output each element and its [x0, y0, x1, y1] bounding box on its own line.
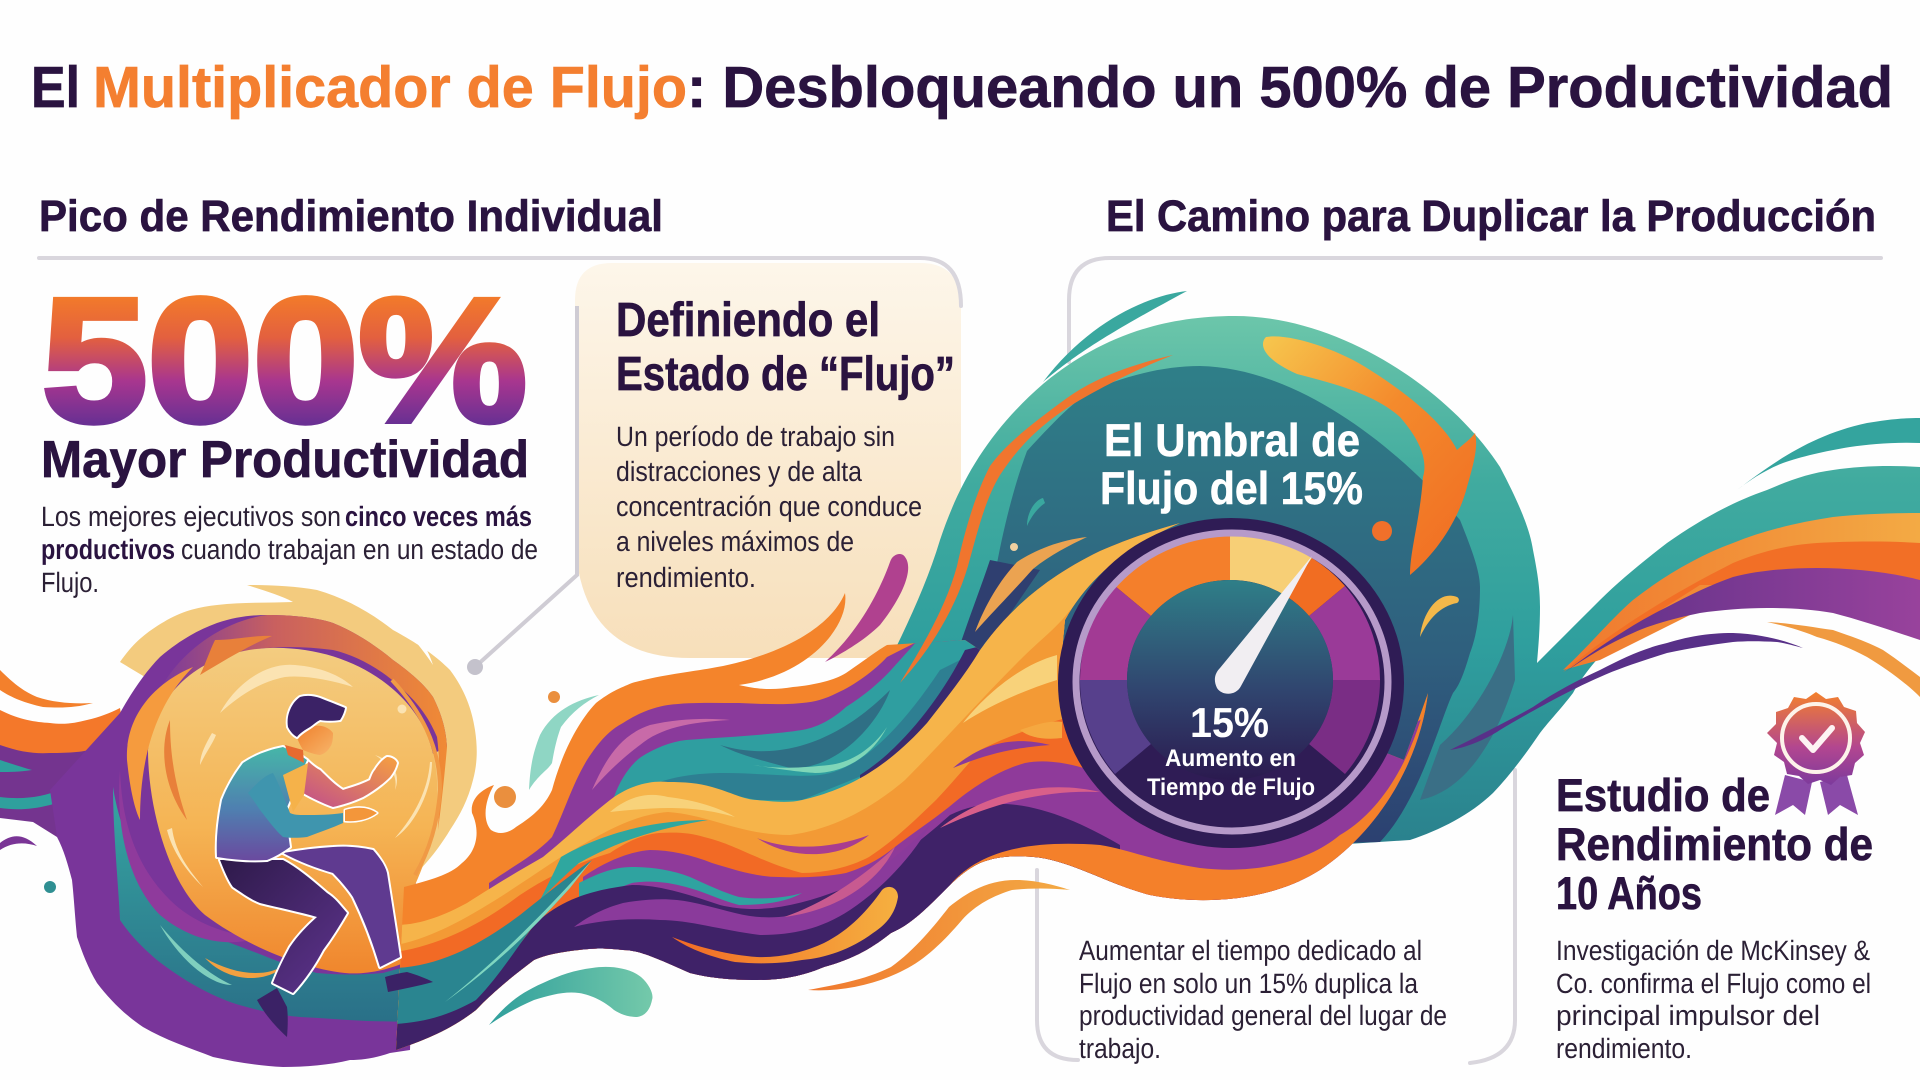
callout body: a niveles máximos de: [616, 526, 854, 557]
far leg: [283, 847, 400, 967]
stat description: cuando trabajan en un estado de: [181, 534, 538, 565]
gauge outer disc: [1058, 518, 1404, 848]
title: El: [31, 55, 80, 120]
stat description: productivos: [41, 534, 175, 565]
orange dots: [494, 691, 560, 808]
mint wisp: [529, 695, 599, 790]
callout body: distracciones y de alta: [616, 456, 862, 487]
callout body: concentración que conduce: [616, 491, 922, 522]
threshold heading: El Umbral de: [1104, 414, 1360, 466]
title: : Desbloqueando un 500% de Productividad: [687, 55, 1893, 120]
orange streak: [808, 880, 1070, 990]
frame lines: [39, 258, 1881, 1063]
purple tail: [1450, 633, 1803, 750]
swirl orange strokes: [127, 636, 440, 875]
stat description: Los mejores ejecutivos son: [41, 501, 341, 532]
gauge caption: Aumento en: [1165, 745, 1296, 772]
chest highlight: [283, 763, 308, 812]
threshold body text: productividad general del lugar de: [1079, 1000, 1447, 1031]
threshold body text: Aumentar el tiempo dedicado al: [1079, 935, 1422, 966]
study heading: Rendimiento de: [1556, 818, 1873, 870]
study body text: Co. confirma el Flujo como el: [1556, 968, 1871, 999]
stat description: cinco veces más: [345, 501, 532, 532]
figure in flow: [217, 696, 433, 1037]
callout body: Un período de trabajo sin: [616, 421, 895, 452]
teal dot: [44, 881, 56, 893]
swirl teal crescent: [113, 787, 412, 1022]
hand: [345, 808, 377, 821]
study body text: Investigación de McKinsey &: [1556, 935, 1870, 966]
study body text: rendimiento.: [1556, 1033, 1692, 1064]
raised arm: [303, 757, 397, 807]
study heading: Estudio de: [1556, 769, 1770, 821]
magenta flame tip: [825, 554, 908, 662]
study heading: 10 Años: [1556, 867, 1702, 919]
face: [297, 726, 333, 755]
hair: [288, 696, 345, 737]
gauge caption: Tiempo de Flujo: [1147, 774, 1315, 801]
swirl inner disc: [148, 648, 437, 973]
swirl around figure: [50, 615, 447, 1067]
threshold body text: Flujo en solo un 15% duplica la: [1079, 968, 1418, 999]
title: Multiplicador de Flujo: [93, 55, 687, 120]
shoes: [257, 972, 433, 1037]
stat description: [41, 501, 538, 598]
neck: [285, 745, 304, 763]
threshold heading: [1100, 414, 1363, 514]
threshold body text: trabajo.: [1079, 1033, 1161, 1064]
stat description: Flujo.: [41, 567, 99, 598]
swirl purple body: [50, 615, 447, 1067]
gauge: [1058, 518, 1404, 848]
callout heading: [616, 294, 955, 401]
gauge sectors: [1080, 534, 1380, 774]
orange thin stream on blob: [900, 355, 1173, 683]
mint swoosh: [489, 967, 653, 1025]
needle: [1215, 556, 1312, 694]
study body text: [1556, 935, 1871, 1064]
torso: [217, 747, 307, 860]
title: [31, 55, 1893, 120]
swirl highlights: [167, 665, 432, 887]
teal blob and right ribbon: [875, 291, 1920, 860]
near arm: [248, 773, 343, 838]
callout body: rendimiento.: [616, 562, 756, 593]
swirl teal streaks: [160, 925, 232, 985]
icon: award badge: [1767, 692, 1865, 815]
gauge ring: [1076, 533, 1388, 831]
left wave tails: [0, 670, 160, 850]
threshold heading: Flujo del 15%: [1100, 462, 1363, 514]
near leg: [220, 860, 347, 993]
swirl top arc: [160, 615, 447, 830]
gauge value: 15%: [1190, 699, 1269, 746]
pale flame halo around figure: [120, 585, 477, 883]
callout heading: Estado de “Flujo”: [616, 348, 955, 401]
callout heading: Definiendo el: [616, 294, 880, 347]
study body text: principal impulsor del: [1556, 1000, 1820, 1031]
connector from callout to figure: [467, 306, 577, 675]
stat label: Mayor Productividad: [41, 431, 529, 489]
main flowing wave: [396, 523, 1428, 1050]
heading: right section: El Camino para Duplicar la Producción: [1106, 192, 1876, 241]
gauge caption: [1147, 745, 1315, 801]
gauge centre: [1127, 580, 1333, 780]
big stat 500%: 500%: [42, 263, 527, 459]
threshold body text: [1079, 935, 1447, 1064]
heading: left section: Pico de Rendimiento Individual: [39, 192, 663, 241]
swirl magenta crescent: [119, 770, 260, 942]
right orange streak: [1767, 622, 1920, 697]
callout panel background: definition of flow: [575, 263, 961, 658]
callout body: [616, 421, 922, 593]
study heading: [1556, 769, 1873, 919]
